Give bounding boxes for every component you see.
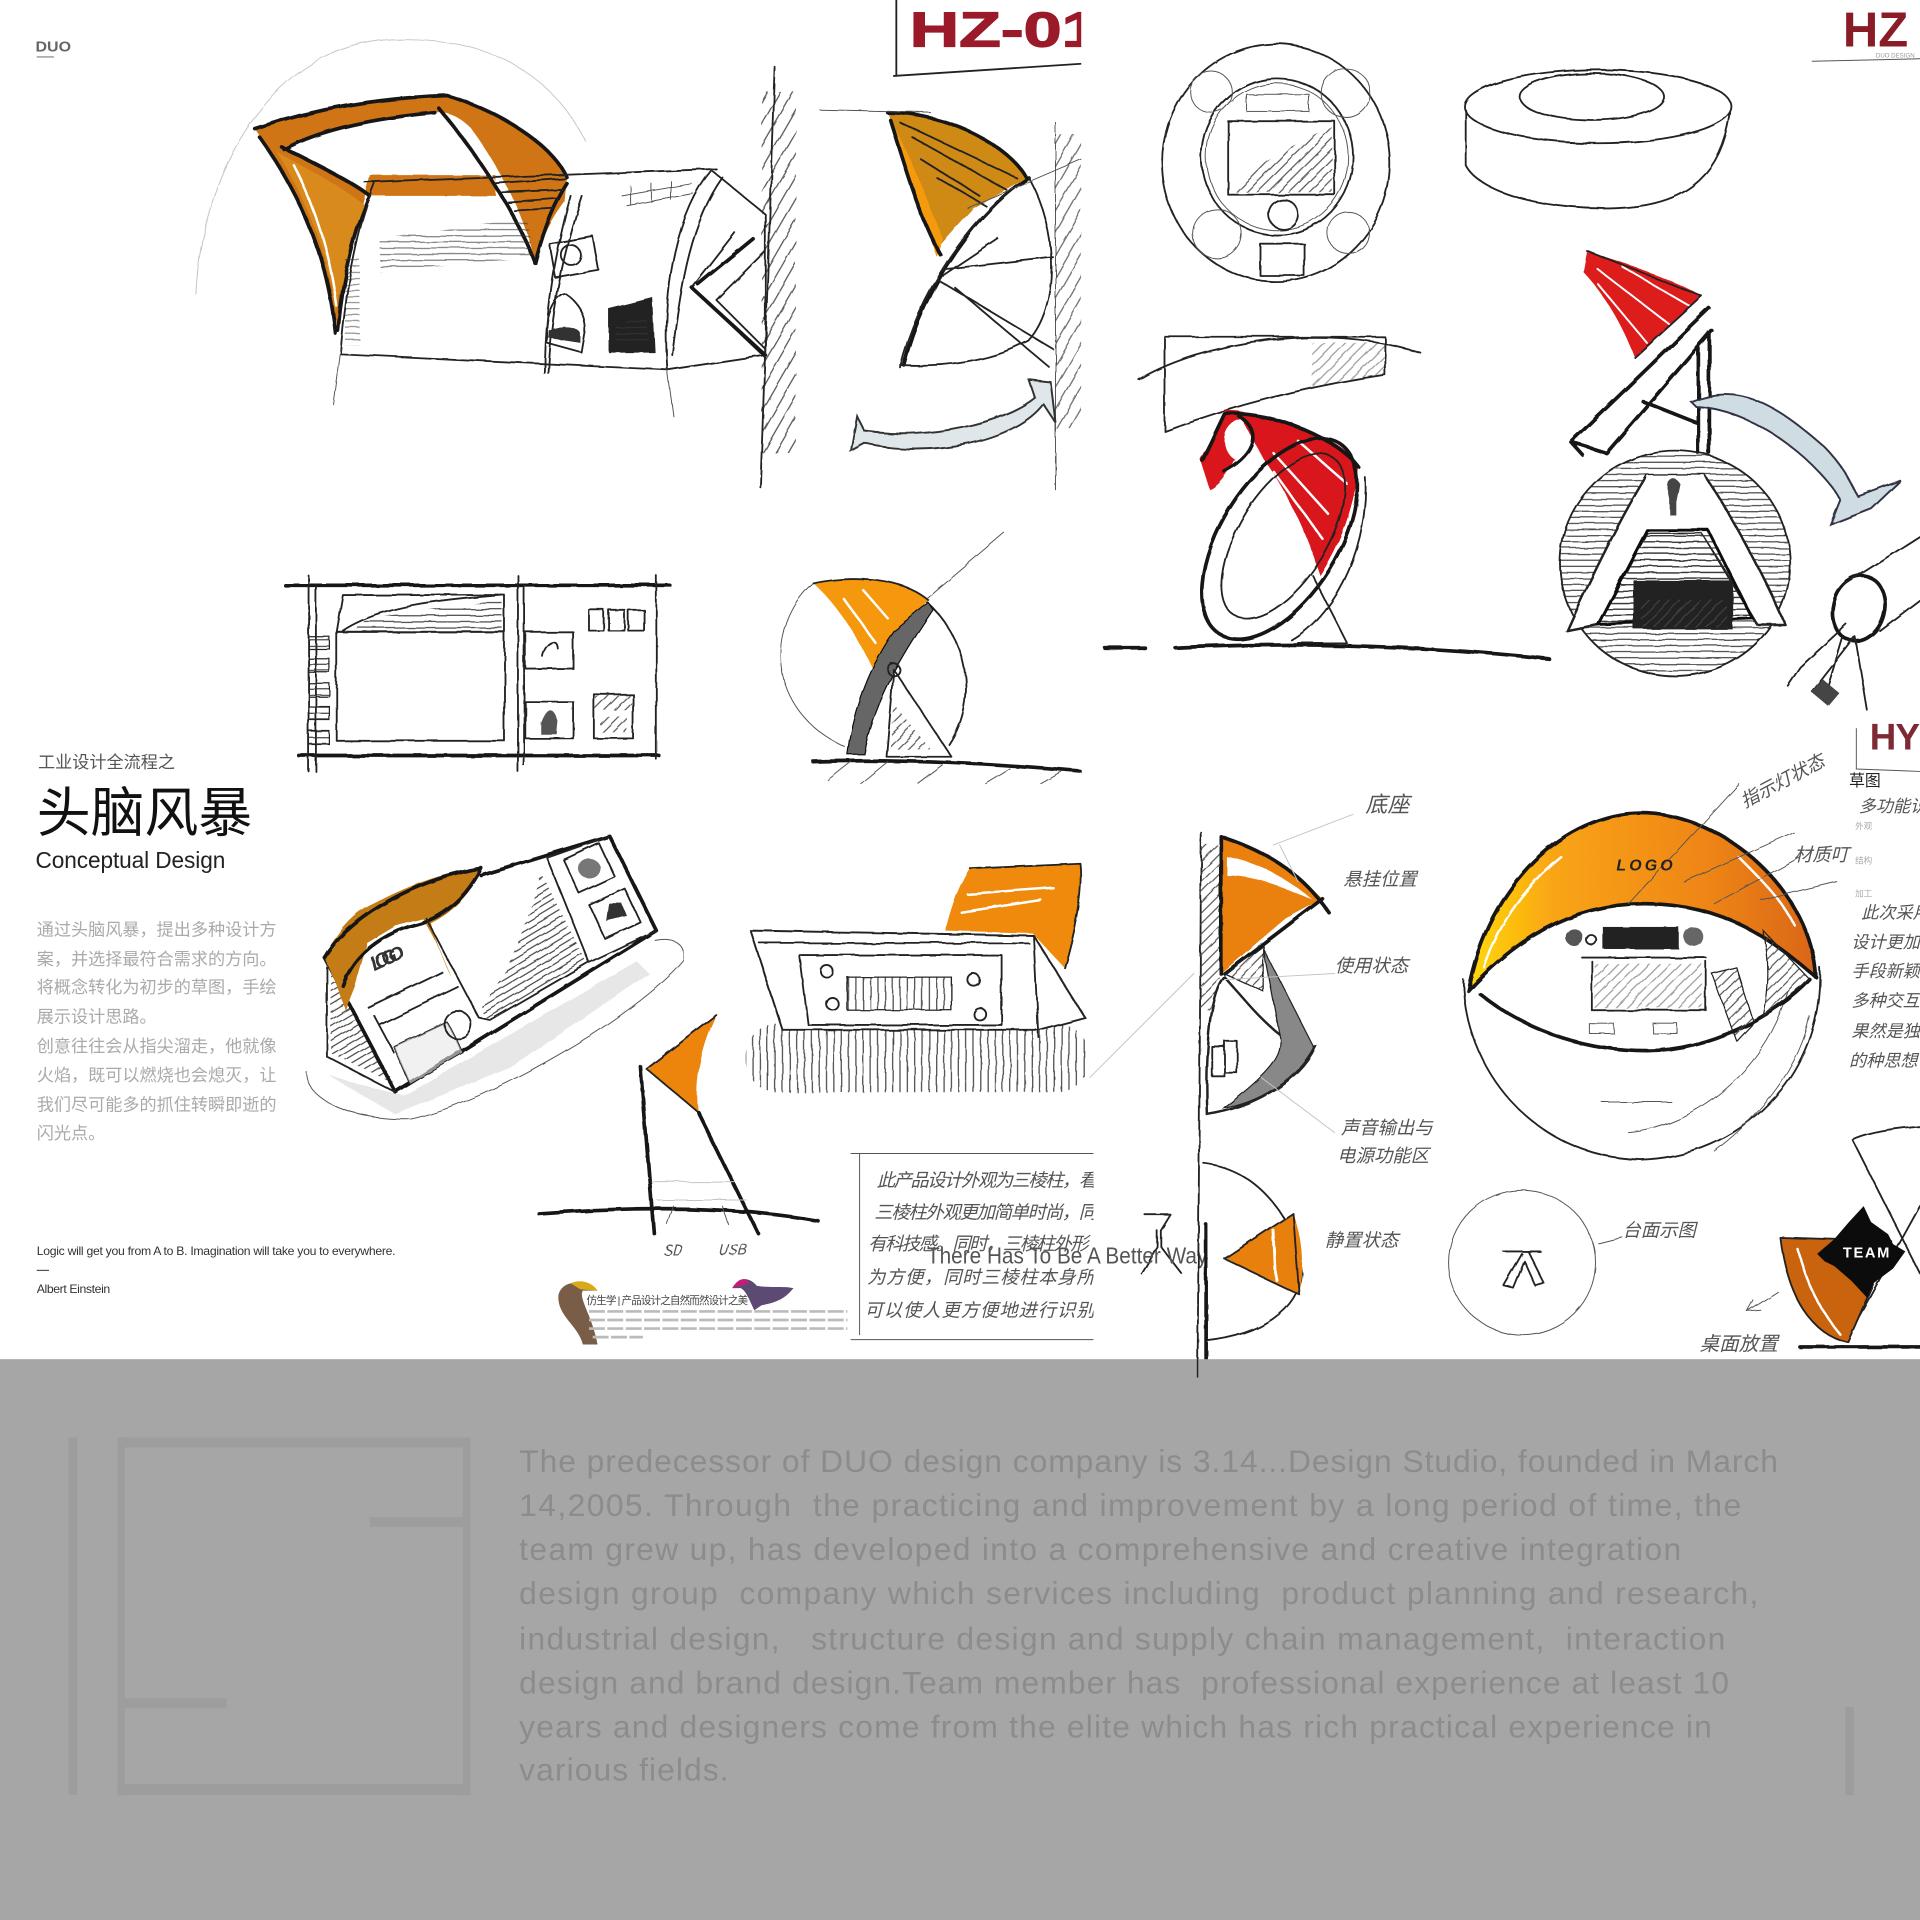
badge: TEAM ink mark <box>1817 1206 1905 1298</box>
sketch: round device front <box>1162 44 1390 282</box>
quote: Logic will get you from A to B. Imagination will take you to everywhere. <box>37 1244 396 1258</box>
logo: LOGO on crescent: LOGO <box>1616 858 1673 875</box>
sign: HZ top right: HZ <box>1843 4 1908 58</box>
sketch: perspective desk kiosk: LOGO <box>367 941 408 976</box>
description text: 将概念转化为初步的草图，手绘 <box>37 977 276 997</box>
logo: DUO: DUO <box>36 39 71 55</box>
sketch: top view circle <box>1449 1190 1622 1335</box>
tagline: There Has To Be A Better Way <box>927 1243 1208 1269</box>
quote: Albert Einstein <box>37 1282 110 1296</box>
quote <box>37 1244 396 1296</box>
sketch: disc <box>1464 70 1731 208</box>
badge: TEAM ink mark: TEAM <box>1843 1246 1889 1262</box>
sketch: standing triangle with fin <box>539 1015 818 1260</box>
handwritten note: 可以使人更方便地进行识别 <box>864 1299 1097 1320</box>
description text: 创意往往会从指尖溜走，他就像 <box>37 1036 276 1056</box>
title block: Conceptual Design <box>36 847 225 873</box>
block: bionics note with toucans <box>558 1279 847 1344</box>
sketch: red fin on arm <box>1571 251 1712 456</box>
orange canopy <box>255 96 567 333</box>
description text: 通过头脑风暴，提出多种设计方 <box>37 920 276 940</box>
handwritten note: 有科技感。同时，三棱柱外形 <box>868 1233 1091 1254</box>
annotation leader lines <box>1090 814 1353 1133</box>
sketch: standing triangle with fin: SD <box>662 1239 683 1260</box>
handwritten note: 三棱柱外观更加简单时尚，同 <box>874 1201 1100 1222</box>
sketch: kiosk side view with rotation arrow <box>820 110 1081 490</box>
panel buttons and logo <box>546 181 693 353</box>
company paragraph: 14,2005. Through the practicing and improvement by a long period of time, the <box>519 1487 1741 1523</box>
sign: HZ-01: HZ-01 <box>910 4 1100 58</box>
title block: 头脑风暴 <box>37 783 252 843</box>
company paragraph: various fields. <box>519 1751 729 1787</box>
sketch: round hatched device back <box>1560 451 1790 676</box>
decorative frame <box>69 1438 1854 1795</box>
sketch: half circle resting state <box>1204 1163 1302 1359</box>
description text: 我们尽可能多的抓住转瞬即逝的 <box>37 1095 276 1115</box>
sketch: cable connector <box>1788 536 1920 710</box>
sketch: wall mounted kiosk perspective <box>196 39 796 487</box>
handwritten callout labels: 台面示图 <box>1622 1220 1699 1241</box>
right column: HY sign and notes: HY <box>1870 716 1920 757</box>
handwritten callout labels: 悬挂位置 <box>1343 868 1419 889</box>
description text: 展示设计思路。 <box>37 1006 157 1026</box>
title block <box>36 752 252 873</box>
arrow: rotate <box>851 380 1056 451</box>
panel: gray company band <box>0 1359 1920 1920</box>
arrow: curved down to cable <box>1691 394 1900 524</box>
title block: 工业设计全流程之 <box>38 752 175 772</box>
sign: HZ top right <box>1812 4 1920 61</box>
icon: toucan purple <box>732 1279 793 1310</box>
orange crescent <box>888 113 1026 257</box>
sketch: large sphere with orange crescent <box>1463 784 1837 1160</box>
sign: HZ-01 <box>894 0 1100 76</box>
description text: 案，并选择最符合需求的方向。 <box>37 949 276 969</box>
handwritten note: 为方便，同时三棱柱本身所 <box>867 1266 1097 1287</box>
sketch: standing triangle with fin: USB <box>718 1239 748 1260</box>
description text: 闪光点。 <box>37 1123 105 1143</box>
right column: HY sign and notes: 草图 <box>1849 772 1881 790</box>
red panels <box>1200 410 1359 576</box>
description text <box>37 920 276 1143</box>
block: bionics note with toucans: 仿生学 | 产品设计之自然而然设计之美 <box>587 1294 749 1307</box>
right column: HY sign and notes: 果然是独 <box>1851 1021 1920 1041</box>
company paragraph: The predecessor of DUO design company is 3.14...Design Studio, founded in March <box>519 1443 1778 1479</box>
handwritten callout labels: 声音输出与 <box>1341 1117 1434 1138</box>
right column: HY sign and notes <box>1849 716 1920 1071</box>
handwritten callout labels: 材质叮 <box>1794 844 1853 865</box>
right column: HY sign and notes: 的种思想 <box>1849 1051 1919 1071</box>
sketch: desk kiosk with orange top <box>746 863 1089 1092</box>
right column: HY sign and notes: 结构 <box>1855 854 1873 865</box>
sketch: perspective desk kiosk <box>306 836 684 1119</box>
sketch: orange bowl with TEAM mark <box>1747 1127 1920 1347</box>
handwritten callout labels: 静置状态 <box>1325 1230 1401 1251</box>
handwritten note <box>851 1153 1100 1340</box>
company paragraph: industrial design, structure design and supply chain management, interaction <box>519 1620 1725 1656</box>
right column: HY sign and notes: 外观 <box>1855 820 1873 831</box>
company paragraph: design group company which services including product planning and research, <box>519 1575 1758 1611</box>
handwritten callout labels: 指示灯状态 <box>1737 749 1830 812</box>
panel icons <box>563 843 640 938</box>
handwritten callout labels: 桌面放置 <box>1700 1334 1780 1356</box>
company paragraph <box>519 1443 1778 1787</box>
sketch: red tilted wheel <box>1104 337 1549 665</box>
handwritten callout labels <box>1325 749 1853 1356</box>
icon: toucan brown <box>558 1281 598 1344</box>
right column: HY sign and notes: 设计更加 <box>1851 932 1920 952</box>
company paragraph: years and designers come from the elite which has rich practical experience in <box>519 1709 1712 1745</box>
handwritten callout labels: 使用状态 <box>1335 955 1411 976</box>
description text: 火焰，既可以燃烧也会熄灭，让 <box>37 1065 276 1085</box>
handwritten callout labels: 电源功能区 <box>1337 1145 1432 1166</box>
icon: small tripod <box>1141 1215 1182 1273</box>
handwritten callout labels: 底座 <box>1365 792 1412 817</box>
sketch: side views on wall <box>1198 833 1329 1378</box>
hatched screen <box>482 873 587 1020</box>
right column: HY sign and notes: 手段新颖 <box>1851 961 1920 981</box>
company paragraph: team grew up, has developed into a comprehensive and creative integration <box>519 1531 1681 1567</box>
sketch: side circle with orange shade <box>780 533 1080 784</box>
company paragraph: design and brand design.Team member has professional experience at least 10 <box>519 1664 1729 1700</box>
right column: HY sign and notes: 加工 <box>1855 888 1873 898</box>
right column: HY sign and notes: 多种交互 <box>1851 991 1920 1011</box>
sketch: front elevation <box>285 576 670 771</box>
sign: HZ top right: DUO DESIGN <box>1876 53 1915 60</box>
handwritten note: 此产品设计外观为三棱柱，看 <box>877 1170 1099 1191</box>
